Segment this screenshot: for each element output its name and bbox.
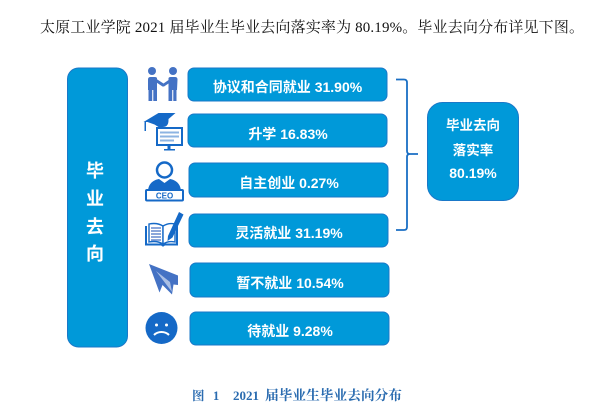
figure caption: 图 [192, 389, 205, 403]
icon: paper plane [149, 264, 178, 294]
bracket arrow [396, 80, 418, 230]
bar: self-employment [189, 163, 388, 197]
bar: not yet employed [190, 263, 389, 297]
panel: left category column: 向 [86, 244, 104, 264]
bar: agreement and contract employment [188, 68, 387, 101]
icon: sad face [146, 312, 178, 344]
figure caption: 届毕业生毕业去向分布 [265, 387, 402, 404]
icon: CEO person: CEO [156, 192, 173, 200]
panel: left category column [68, 68, 128, 347]
icon: handshake [148, 67, 178, 101]
bar: awaiting employment: 待就业 9.28% [247, 323, 333, 339]
panel: placement rate callout: 80.19% [449, 165, 497, 181]
bar: self-employment: 自主创业 0.27% [239, 175, 339, 191]
bar: agreement and contract employment: 协议和合同就业 31.90% [213, 79, 363, 95]
panel: placement rate callout: 落实率 [453, 142, 493, 158]
figure caption [192, 387, 402, 404]
icon: open book and pen [146, 212, 184, 246]
bar: further study [188, 114, 387, 147]
panel: left category column: 去 [86, 217, 104, 237]
bar: not yet employed: 暂不就业 10.54% [236, 275, 344, 291]
figure caption: 1 [213, 389, 219, 403]
bar: further study: 升学 16.83% [248, 126, 328, 142]
bar: flexible employment: 灵活就业 31.19% [235, 225, 343, 241]
icon: graduation cap and monitor [144, 113, 183, 150]
bar: flexible employment [189, 214, 388, 247]
bar: awaiting employment [190, 312, 389, 345]
title sentence: 太原工业学院 2021 届毕业生毕业去向落实率为 80.19%。毕业去向分布详见下图。 [40, 18, 584, 36]
panel: left category column: 毕 [86, 161, 104, 181]
icon: CEO person [145, 162, 184, 202]
panel: placement rate callout: 毕业去向 [446, 117, 500, 133]
panel: placement rate callout [428, 102, 518, 200]
figure caption: 2021 [233, 388, 259, 403]
panel: left category column: 业 [86, 189, 104, 209]
